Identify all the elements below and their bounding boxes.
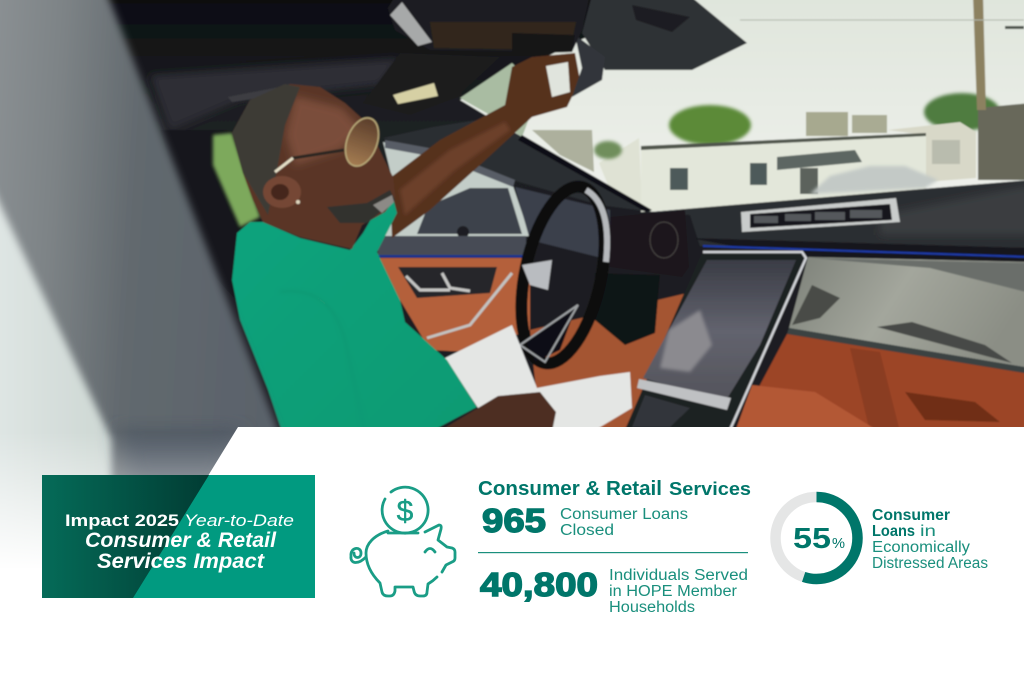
stat: consumer loans closed: Closed xyxy=(560,522,614,539)
donut label: Distressed Areas xyxy=(872,555,988,572)
stat: consumer loans closed xyxy=(482,502,688,539)
white trousers xyxy=(445,325,632,432)
stat: consumer loans closed: Consumer Loans xyxy=(560,506,688,523)
donut label: Economically xyxy=(872,539,970,556)
street scene xyxy=(532,0,1024,212)
donut label: in xyxy=(920,523,936,540)
stat: individuals served: Individuals Served xyxy=(609,567,748,584)
donut chart: 55 percent: 55 xyxy=(793,523,831,555)
dashboard xyxy=(651,179,1024,248)
side window with parked car xyxy=(382,141,530,238)
donut chart: 55 percent xyxy=(776,497,858,579)
stat: individuals served: in HOPE Member xyxy=(609,583,737,600)
sun visor xyxy=(376,60,396,88)
donut label: Loans xyxy=(872,523,915,540)
windshield pillar and dark trim xyxy=(383,118,652,212)
donut label xyxy=(872,507,988,572)
door xyxy=(376,258,530,352)
hand on leg xyxy=(445,391,557,427)
photo: man adjusting mirror in car xyxy=(0,0,1024,542)
title text: Consumer & Retail xyxy=(85,529,277,552)
man: shirt xyxy=(232,186,477,432)
arm raised xyxy=(390,53,580,238)
centre display xyxy=(624,252,806,432)
section heading: Consumer & Retail xyxy=(478,478,662,500)
stat: individuals served: 40,800 xyxy=(480,566,598,603)
man: head xyxy=(232,84,395,249)
icon: piggy bank with dollar coin: $ xyxy=(397,495,414,528)
carbon trim xyxy=(789,257,1024,368)
title text: Year-to-Date xyxy=(184,511,294,530)
steering wheel xyxy=(514,180,612,370)
title text: Impact 2025 xyxy=(65,511,179,530)
white lower panel xyxy=(0,427,1024,682)
title text: Services Impact xyxy=(97,550,265,573)
air vent xyxy=(741,198,900,232)
donut chart: 55 percent: % xyxy=(832,535,845,552)
title banner xyxy=(42,475,315,598)
green foliage behind head xyxy=(213,133,260,227)
section heading xyxy=(478,478,751,500)
orange leather dash xyxy=(759,333,1024,427)
title text xyxy=(65,511,294,573)
footwell xyxy=(528,292,685,427)
stat: consumer loans closed: 965 xyxy=(482,502,546,539)
stat: individuals served xyxy=(480,566,748,616)
rear-view mirror and console xyxy=(388,0,747,97)
instrument cluster xyxy=(630,210,686,272)
sky through windshield xyxy=(460,0,1024,212)
section heading: Services xyxy=(669,479,751,499)
stat: individuals served: Households xyxy=(609,599,695,616)
icon: piggy bank with dollar coin xyxy=(351,487,455,596)
donut label: Consumer xyxy=(872,507,950,524)
fade to white xyxy=(0,432,240,570)
blurred pillar in foreground xyxy=(0,0,290,620)
